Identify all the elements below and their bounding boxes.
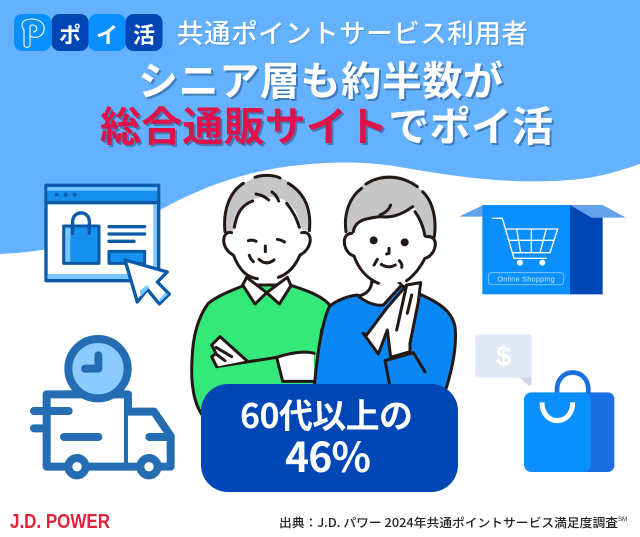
source note: 出典：J.D. パワー 2024年共通ポイントサービス満足度調査 bbox=[279, 514, 618, 531]
service mark: SM bbox=[618, 517, 627, 523]
title line 1: シニア層も約半数が bbox=[138, 49, 503, 107]
face bbox=[248, 239, 285, 263]
collar bbox=[243, 277, 291, 304]
hands bbox=[363, 283, 421, 357]
illustration: senior woman in blue top with hands together bbox=[312, 175, 456, 417]
icon: dollar speech bubble bbox=[475, 334, 532, 386]
icon: delivery truck with clock bbox=[34, 339, 171, 475]
hair bbox=[346, 175, 435, 237]
subtitle: 共通ポイントサービス利用者 bbox=[178, 13, 529, 52]
body: blue bbox=[312, 285, 456, 417]
icon: online shopping box bbox=[459, 205, 626, 294]
logo: J.D. POWER: J.D. POWER bbox=[10, 511, 110, 533]
face bbox=[370, 236, 378, 244]
logo badges: P ポイ活 bbox=[14, 14, 162, 51]
callout: 60代以上の 46% bbox=[201, 384, 458, 492]
logo badges: P ポイ活: ポ bbox=[59, 18, 81, 50]
icon: dollar speech bubble: $ bbox=[496, 340, 512, 371]
callout: 60代以上の 46%: 60代以上の bbox=[240, 389, 413, 438]
header wave background bbox=[0, 0, 640, 254]
subtitle: 共通ポイントサービス利用者 bbox=[177, 12, 528, 51]
hair bbox=[225, 175, 310, 233]
callout: 60代以上の 46%: 46% bbox=[285, 424, 371, 484]
icon: P logo bbox=[22, 19, 44, 47]
title line 2: 総合通販サイトでポイ活 bbox=[100, 93, 553, 153]
icon: cart bbox=[488, 218, 564, 285]
title line 1: シニア層も約半数が bbox=[140, 51, 505, 109]
title line 2: 総合通販サイトでポイ活 bbox=[102, 95, 555, 155]
icon: browser window with bag and cursor bbox=[46, 185, 169, 304]
arm bbox=[217, 353, 314, 381]
illustration: senior man in green sweater bbox=[192, 175, 331, 417]
logo badges: P ポイ活: 活 bbox=[133, 18, 155, 50]
icon: online shopping box: Online Shopping bbox=[497, 274, 555, 283]
logo badges: P ポイ活: イ bbox=[96, 18, 118, 50]
body: green bbox=[192, 285, 331, 417]
icon: shopping bag bbox=[524, 372, 614, 472]
